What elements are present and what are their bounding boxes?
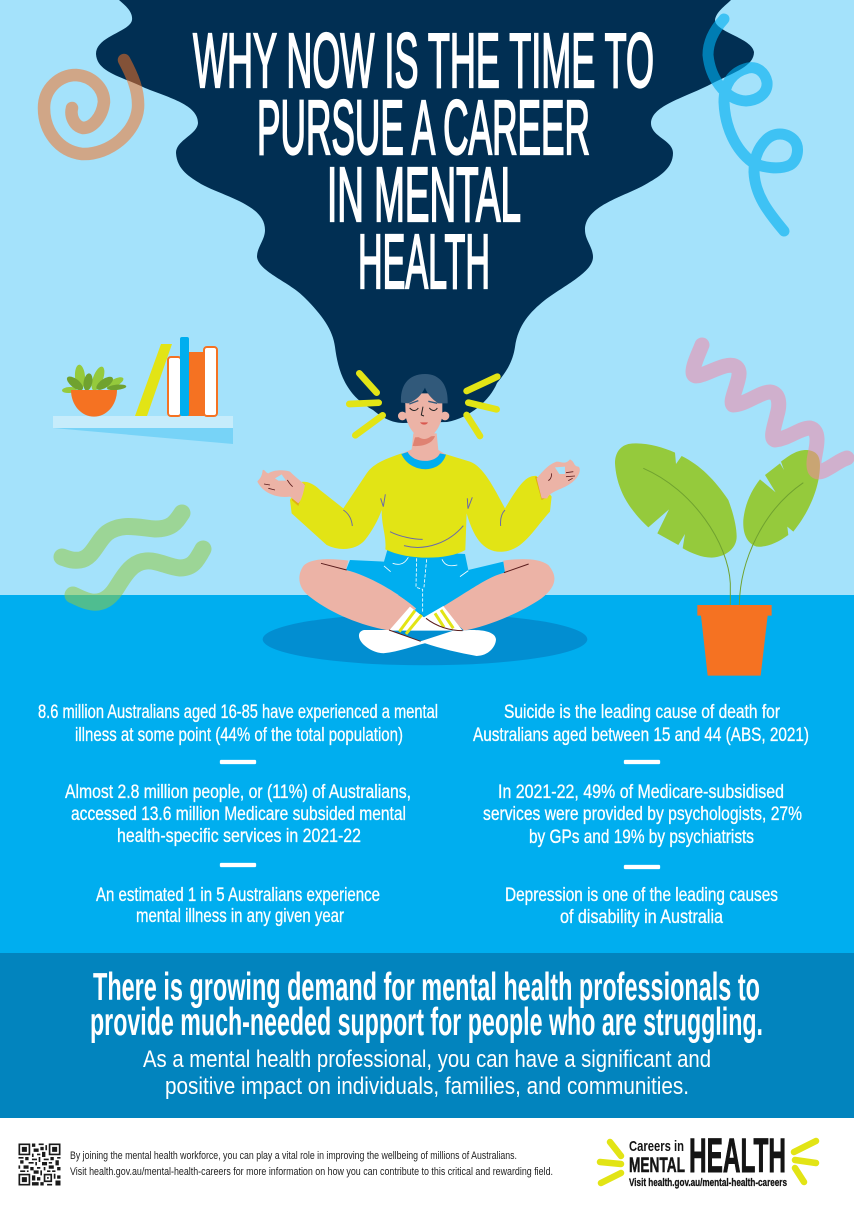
fact: 8.6 million: illness at some point (44% of the total population): [75, 724, 403, 746]
sky background: [0, 0, 854, 595]
cuffs: [292, 477, 548, 506]
eyebrows and eyes: [409, 401, 437, 404]
fact: 1 in 5: mental illness in any given year: [136, 905, 344, 927]
fact: depression: of disability in Australia: [560, 906, 723, 928]
hair cap: [401, 374, 448, 403]
stems: [643, 468, 730, 605]
pot: [697, 605, 772, 676]
shelf shadow: [53, 428, 233, 444]
shelf with plant and books: [53, 337, 233, 444]
logo rays: [600, 1141, 816, 1183]
fact: 1 in 5: [96, 884, 380, 927]
sweater: [290, 453, 552, 558]
title: [193, 18, 654, 305]
fact: depression: Depression is one of the leading causes: [505, 884, 778, 906]
right leaf: [743, 450, 820, 547]
fact: Medicare services: by GPs and 19% by psychiatrists: [529, 826, 754, 848]
collar: [401, 452, 446, 469]
title: HEALTH: [358, 219, 490, 305]
subtext: As a mental health professional, you can have a significant and: [143, 1046, 711, 1073]
mouth: [420, 422, 428, 425]
logo: Careers in Mental Health: Visit health.gov.au/mental-health-careers: [629, 1177, 787, 1189]
fact: suicide: Suicide is the leading cause of death for: [504, 701, 780, 723]
ears: [398, 412, 407, 420]
small plant: [62, 364, 127, 417]
fact: Medicare services: [483, 781, 802, 848]
swirl: brown spiral: [44, 60, 138, 154]
hair silhouette: [96, 0, 754, 423]
floor: [0, 595, 854, 953]
squiggle: pink zigzag: [693, 345, 847, 472]
footer text: [70, 1150, 553, 1178]
fact: 2.8 million: Almost 2.8 million people, or (11%) of Australians,: [65, 781, 411, 803]
fact: 2.8 million: health-specific services in 2021-22: [117, 825, 361, 847]
footer background: [0, 1118, 854, 1208]
footer text: By joining the mental health workforce, you can play a vital role in improving the wellbeing of millions of Australians.: [70, 1150, 517, 1162]
icon: QR code: [18, 1144, 60, 1186]
left hand: [257, 470, 305, 503]
fact: 8.6 million: 8.6 million Australians aged 16-85 have experienced a mental: [38, 701, 438, 723]
headline: [90, 966, 763, 1044]
fact: 2.8 million: accessed 13.6 million Medicare subsided mental: [71, 803, 406, 825]
right leg: [440, 559, 554, 631]
title: IN MENTAL: [327, 152, 521, 238]
squiggle: green bottom: [73, 549, 203, 602]
logo: Careers in Mental Health: MENTAL: [629, 1154, 685, 1177]
shorts stitching: [416, 558, 427, 613]
fact: depression: [505, 884, 778, 928]
footer text: Visit health.gov.au/mental-health-careers for more information on how you can contribute to this critical and rewarding field.: [70, 1166, 553, 1178]
squiggle: green top: [62, 513, 182, 560]
floor shadow: [263, 613, 587, 665]
left leg: [299, 559, 417, 631]
fact: Medicare services: In 2021-22, 49% of Medicare-subsidised: [498, 781, 784, 803]
sweater folds: [343, 494, 505, 547]
neck: [401, 433, 447, 466]
fact: 2.8 million: [65, 781, 411, 847]
fact: suicide: [473, 701, 809, 746]
energy rays: [349, 373, 497, 436]
subtext: positive impact on individuals, families, and communities.: [165, 1073, 689, 1100]
facts: right column: [473, 701, 809, 928]
shorts: [346, 550, 505, 617]
neck shadow: [413, 436, 435, 446]
feet: [359, 630, 496, 656]
sock stripes: [399, 610, 453, 634]
face: [405, 393, 442, 439]
shelf board: [53, 416, 233, 428]
socks: [389, 606, 463, 631]
left leaf: [615, 443, 737, 558]
facts: left column: [38, 701, 438, 927]
subtext: [143, 1046, 711, 1100]
panel: call to action band: [0, 953, 854, 1118]
swirl: blue loops: [708, 19, 797, 231]
fact: 8.6 million: [38, 701, 438, 746]
logo: Careers in Mental Health: Careers in: [629, 1138, 684, 1155]
logo: Careers in Mental Health: [600, 1130, 816, 1189]
books: [135, 344, 172, 416]
right hand: [537, 459, 580, 498]
potted plant: [615, 443, 820, 676]
fact: 1 in 5: An estimated 1 in 5 Australians experience: [96, 884, 380, 906]
meditating person: [257, 373, 587, 665]
